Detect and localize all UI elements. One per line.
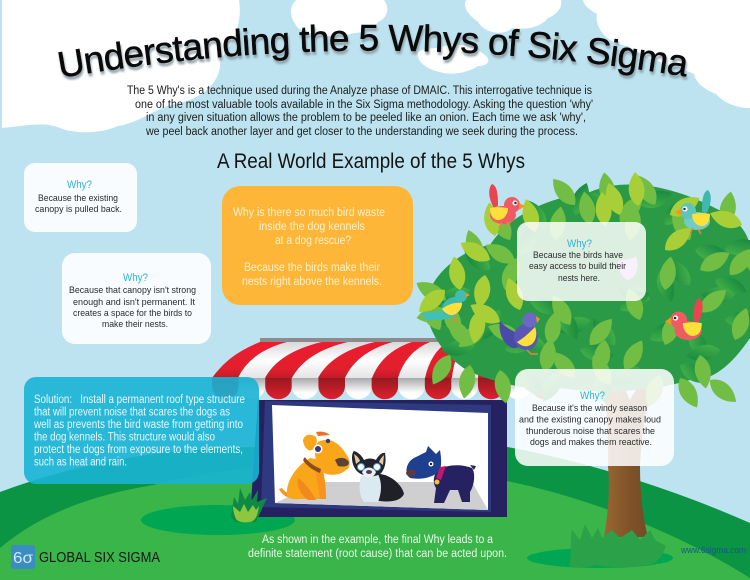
panel: why 1 [24,163,137,232]
awning scallops [212,378,558,399]
title: Understanding the 5 Whys of Six Sigma [58,24,688,81]
why body: creates a space for the birds to [73,308,192,319]
why body: enough and isn't permanent. It [73,297,195,308]
window floor [275,482,488,510]
solution text: such as heat and rain. [34,456,127,468]
logo mark [11,545,35,569]
dark blades [231,488,267,522]
why body [519,403,661,448]
dark green hill [0,447,750,580]
light leaves [413,171,750,411]
ground shadow left [141,505,295,535]
lime leaves [414,171,745,345]
roof bar [260,338,500,344]
question and first answer text [233,207,385,288]
question and first answer text: nests right above the kennels. [242,276,382,288]
why body: and the existing canopy makes loud [519,414,661,426]
closing statement [248,534,507,560]
logo wordmark: GLOBAL SIX SIGMA [39,550,160,566]
solution text [33,394,245,468]
intro text block: we peel back another layer and get closer to the understanding we seek during the process. [145,126,578,138]
icon: scottie dog [406,446,476,503]
intro text block: one of the most valuable tools available in the Six Sigma methodology. Asking the question 'why' [135,99,593,111]
question and first answer text: at a dog rescue? [275,235,351,247]
solution text: well as prevents the bird waste from getting into [33,419,243,431]
intro text block: The 5 Why's is a technique used during the Analyze phase of DMAIC. This interrogative technique is [127,85,592,97]
website url: www.6sigma.com [680,545,746,555]
cloud: top left large [2,0,240,132]
white window [272,405,488,510]
cloud: top centre right [465,0,561,33]
icon: cyan bird top right [675,190,711,234]
hills [0,447,750,580]
building navy body [250,400,507,517]
intro text block [127,85,593,138]
why body: dogs and makes them reactive. [530,437,652,448]
panel: solution [24,377,259,484]
clouds [2,0,750,132]
why body [529,250,626,284]
why body: thunderous noise that scares the [526,426,655,437]
closing statement: definite statement (root cause) that can be acted upon. [248,548,507,560]
solution text: the dog kennels. This structure would also [34,432,215,444]
logo symbol: 6σ [13,550,33,567]
why label: Why? [123,272,148,284]
icon: husky dog [352,451,404,502]
grass tuft at tree base [569,524,666,567]
why body [35,193,122,215]
why body [69,285,196,330]
icon: red bird right [665,298,703,340]
canopy base [425,185,750,391]
why body: canopy is pulled back. [35,204,122,215]
question and first answer text: Why is there so much bird waste [233,207,385,219]
icon: red bird top left [489,184,525,228]
panel: central question [222,186,413,305]
kennel building [212,338,558,517]
solution text: protect the dogs from exposure to the elements, [34,444,243,456]
dark leaves [425,180,750,405]
why label: Why? [580,390,605,402]
panel: why 2 [62,253,211,344]
why body: easy access to build their [529,261,626,272]
why body: Because the existing [38,193,118,204]
why label: Why? [567,238,592,250]
why body: Because the birds have [533,250,623,261]
solution text: Solution: Install a permanent roof type structure [34,394,245,406]
icon: purple bird [499,312,540,354]
cloud: top centre left [291,0,387,36]
tree trunk [600,368,662,537]
awning stripes [212,342,558,378]
question and first answer text: Because the birds make their [244,262,380,274]
intro text block: in any given situation allows the problem to be peeled like an onion. Each time we ask 'why', [146,112,586,124]
icon: teal bird left [420,290,470,322]
panel: why 3 [517,222,646,301]
why body: make their nests. [102,319,168,330]
grass tuft by kennel [231,488,267,522]
ground shadow under tree [527,548,673,568]
icon: orange dog [279,432,350,500]
logo: global six sigma [11,545,160,569]
question and first answer text: inside the dog kennels [259,221,365,233]
inner window frame [261,401,491,512]
icon: faded bird behind panel [618,256,638,280]
why body: Because it's the windy season [532,403,647,414]
closing statement: As shown in the example, the final Why leads to a [262,534,494,546]
section heading: A Real World Example of the 5 Whys [217,150,525,173]
cloud: top right [583,0,750,108]
why body: Because that canopy isn't strong [69,285,196,296]
why body: nests here. [558,273,600,284]
tree canopy [413,171,750,411]
why label: Why? [67,179,92,191]
panel: why 4 [515,369,674,466]
trunk and branches [600,368,662,537]
cloud: small centre [418,45,488,74]
solution text: that will prevent noise that scares the dogs as [34,406,230,418]
light green hill [0,465,750,580]
light blades [233,504,259,522]
